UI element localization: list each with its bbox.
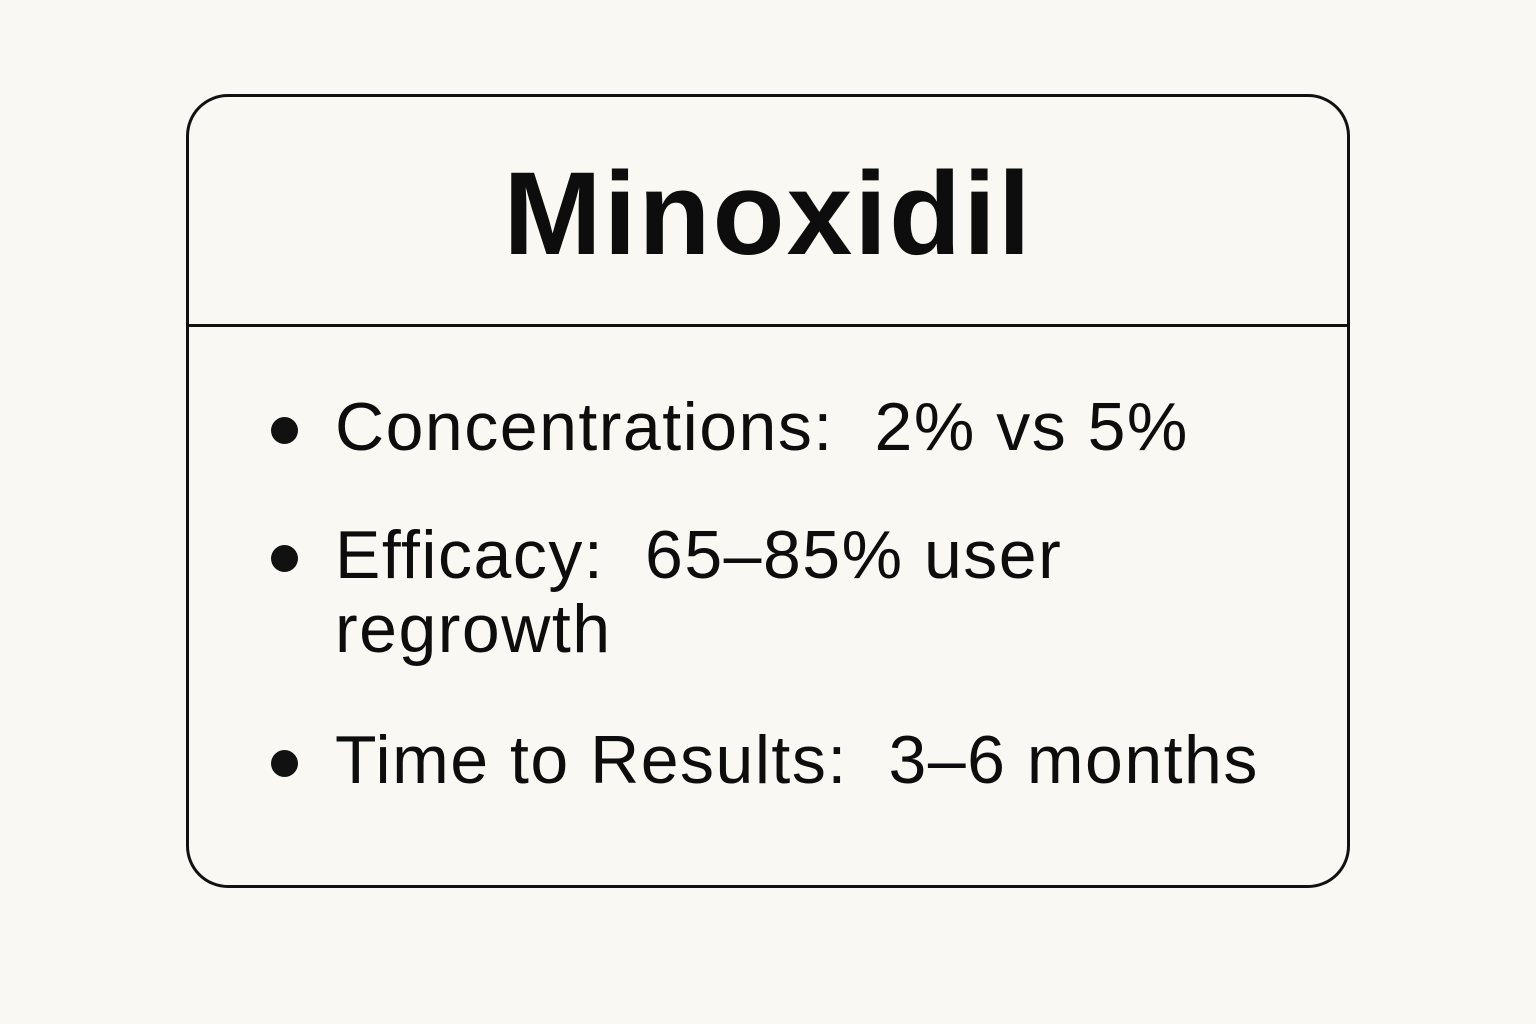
text: efficacy: regrowth [335, 591, 612, 667]
bullet: concentrations [271, 389, 1189, 465]
panel: minoxidil card [186, 94, 1350, 888]
text: time to results: Time to Results: 3–6 months [335, 722, 1259, 798]
title: Minoxidil [503, 148, 1033, 280]
text: efficacy: Efficacy: 65–85% user [335, 517, 1062, 593]
bullet: time to results [271, 722, 1259, 798]
icon: bullet dot [271, 545, 298, 572]
icon: bullet dot [271, 417, 298, 444]
bullet: efficacy [271, 517, 1062, 667]
text: concentrations: Concentrations: 2% vs 5% [335, 389, 1189, 465]
text: efficacy [335, 517, 1062, 667]
icon: bullet dot [271, 750, 298, 777]
